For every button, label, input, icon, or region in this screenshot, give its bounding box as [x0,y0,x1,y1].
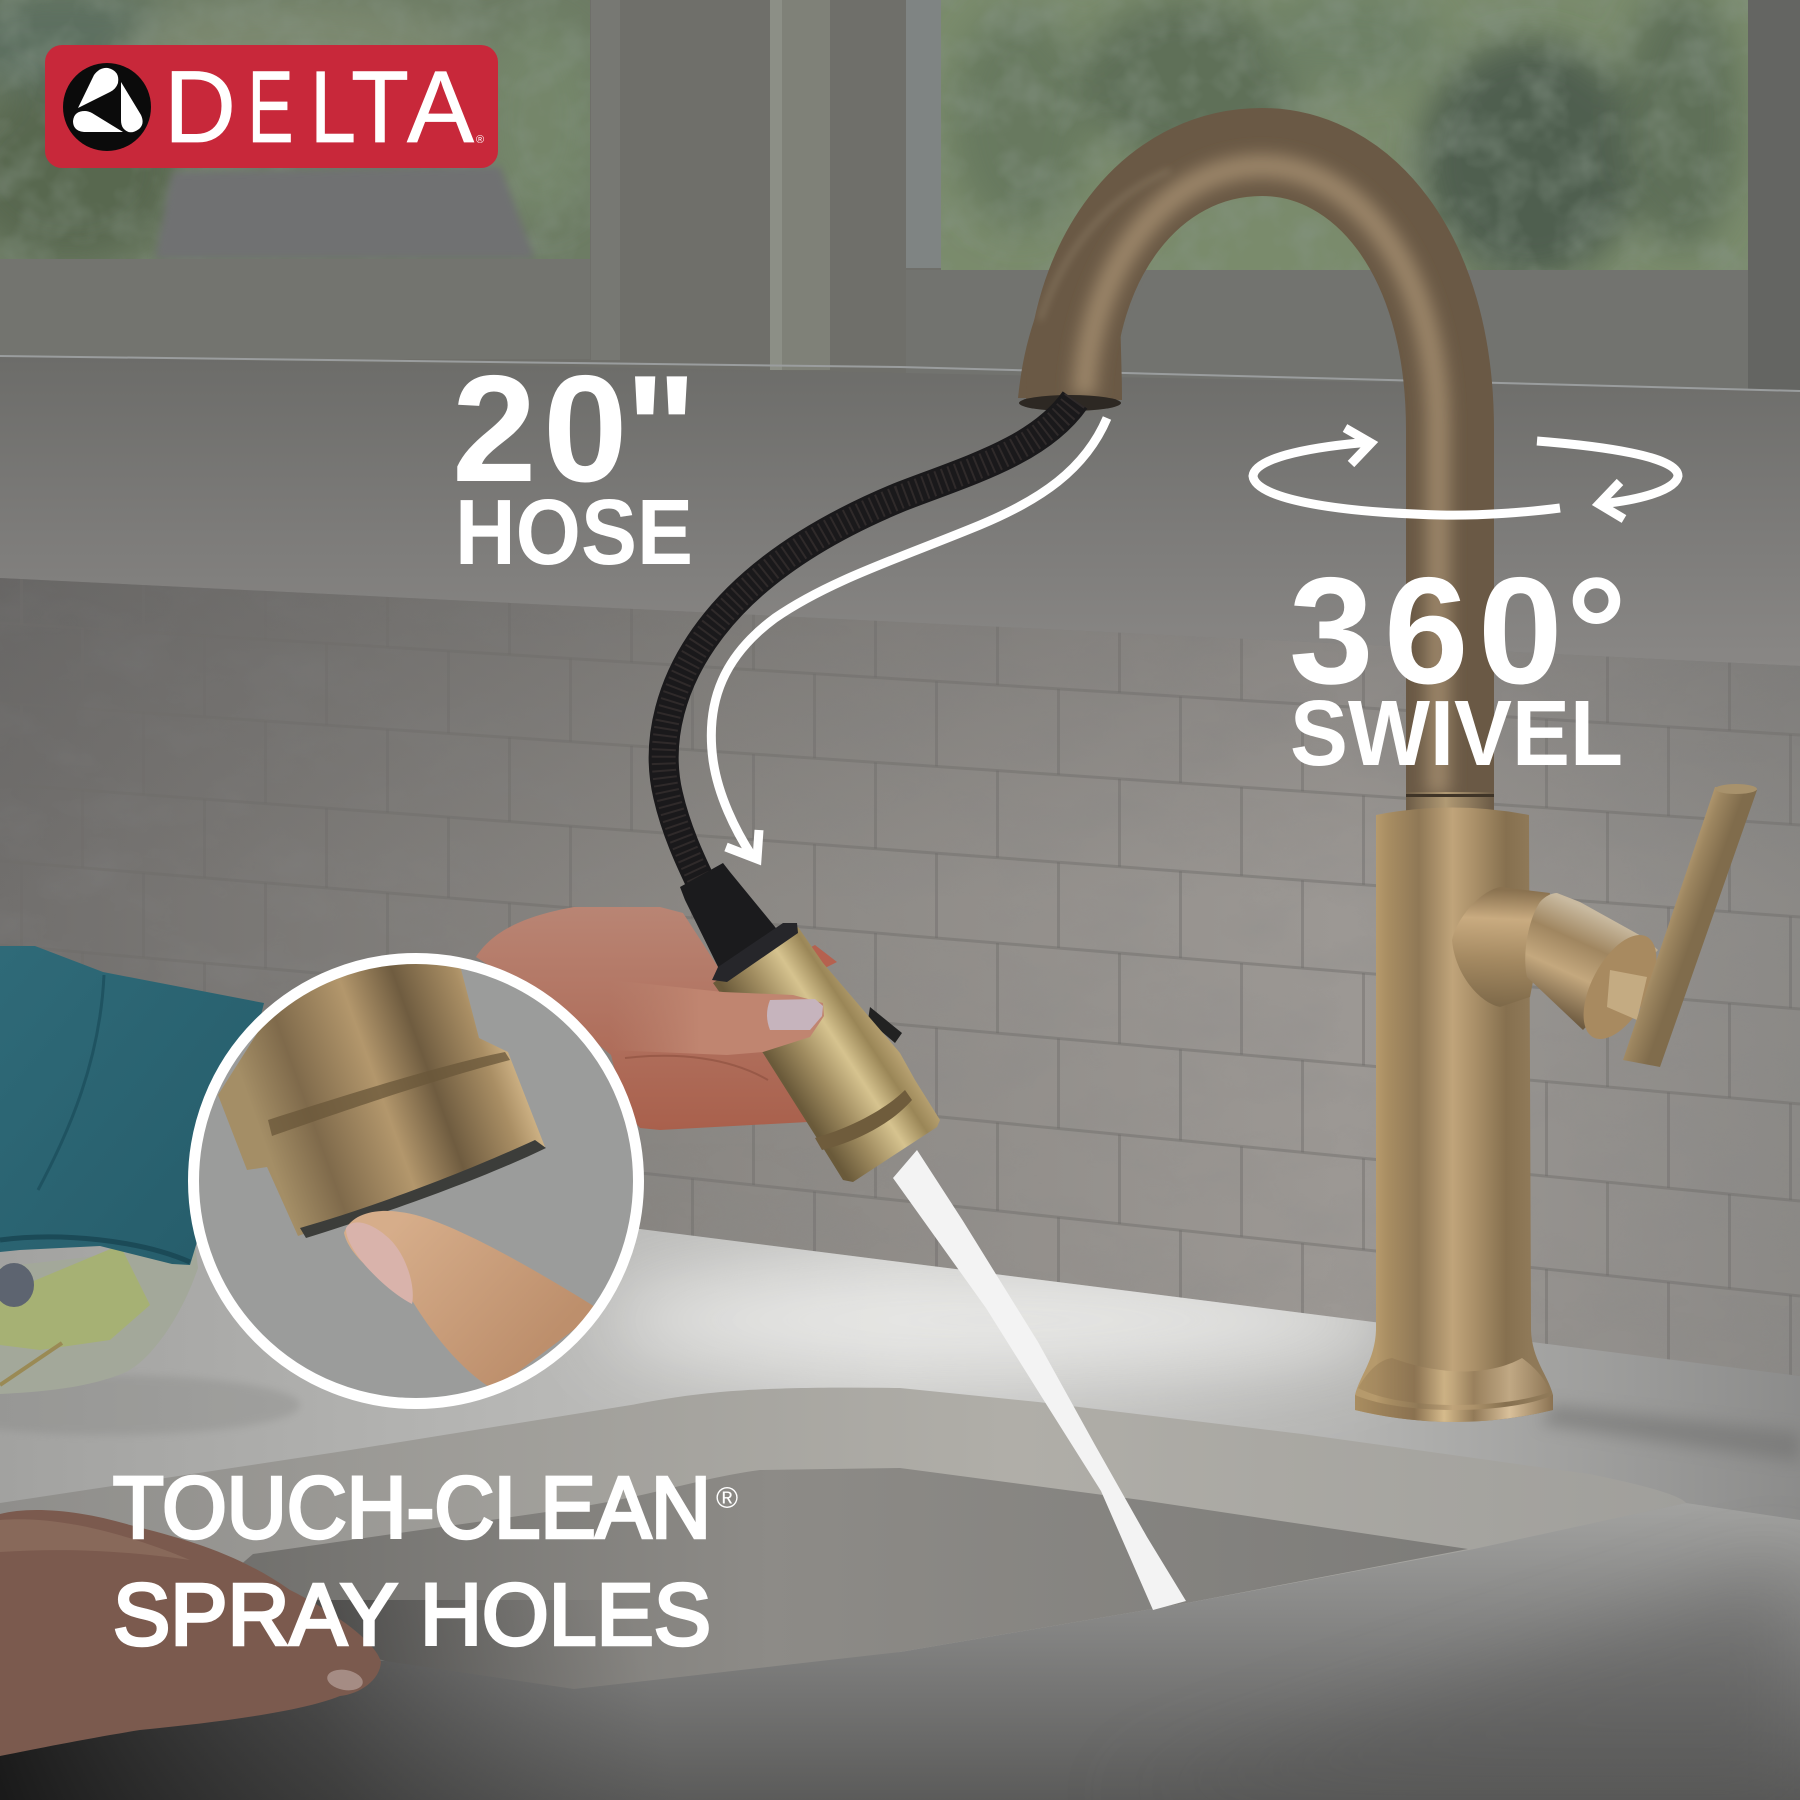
left window with trees and house [0,0,600,260]
fingernail [346,1222,413,1304]
heading: 360 degree swivel: SWIVEL [1290,681,1623,785]
arrow: hose reach [711,418,1107,859]
arrow: 360 degree swivel [1253,428,1678,519]
heading: touch-clean spray holes: ® [716,1482,738,1515]
brand logo: Delta: ® [476,134,484,146]
heading: 20 inch hose: 20" [452,344,697,514]
sink basin [0,1388,1800,1800]
brand logo: Delta: A [407,50,474,164]
spray face [218,950,545,1236]
brand logo: Delta: L [310,50,356,164]
water stream [893,1150,1186,1610]
brand logo: Delta: T [351,50,409,164]
brand logo: Delta: D [164,50,236,164]
heading: 360 degree swivel: 360° [1289,546,1627,716]
heading: touch-clean spray holes: TOUCH-CLEAN [113,1460,711,1556]
faucet: spout and neck [1018,152,1494,815]
spray head [680,863,940,1182]
brand logo: Delta: E [248,50,294,164]
heading: touch-clean spray holes: SPRAY HOLES [113,1566,711,1664]
brand logo: Delta [45,45,498,168]
glass bowl with greens [0,1245,300,1435]
ridge on nozzle [268,1052,510,1136]
countertop [0,1228,1800,1661]
faucet: body and base [1355,808,1553,1422]
spray holes [300,1140,546,1238]
thumb and fingernail over the spray head [610,980,824,1055]
black braided hose [664,400,1075,885]
heading: 20 inch hose: HOSE [455,480,693,584]
heading: touch-clean spray holes [113,1460,738,1664]
upper hand holding the spray head [476,907,837,1130]
fingertip [344,1211,600,1390]
faucet: side handle and lever [1452,784,1757,1067]
lower hand resting on counter [0,1510,381,1756]
teal sleeve [0,946,264,1307]
right window with trees [941,0,1748,280]
callout circle: touch-clean detail [192,950,640,1405]
window sill ledge [0,356,1800,666]
marble tile backsplash [0,570,1800,1390]
background: window frame wall [0,0,1800,400]
